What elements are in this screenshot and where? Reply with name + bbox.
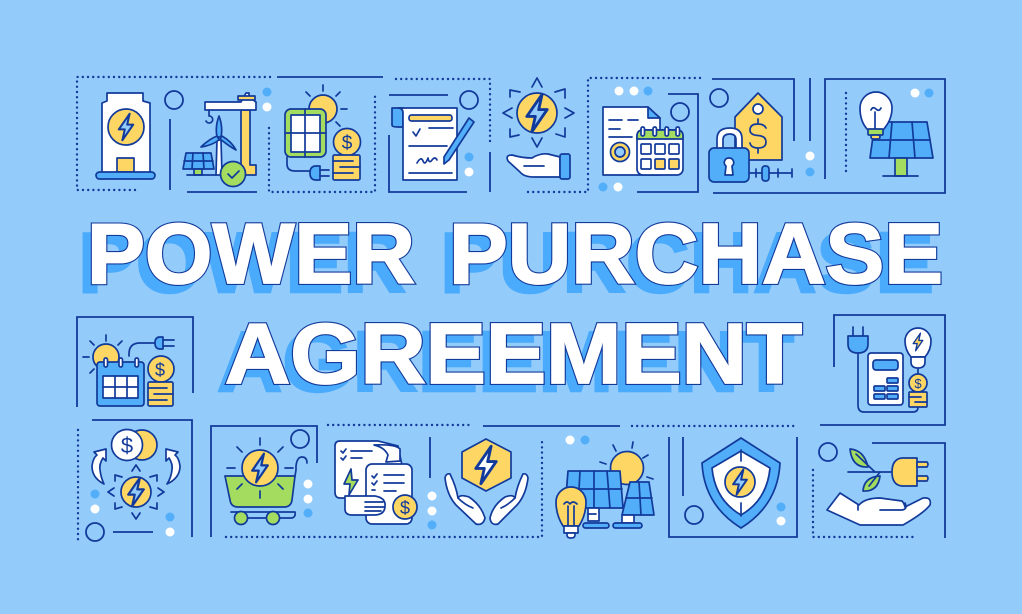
title outline: PURCHASE (449, 207, 943, 302)
icon: plug, calculator, bulb and coins: $ (914, 376, 922, 391)
icon: sun in open hand (503, 78, 574, 179)
icon: energy hexagon in hands (445, 439, 528, 524)
icon: power station building (96, 93, 155, 179)
title (78, 207, 943, 410)
icon: documents in hand with coin (335, 441, 417, 524)
title shadow: POWER (78, 216, 406, 311)
title text: PURCHASE (449, 207, 943, 302)
icon: document and calendar (603, 107, 683, 175)
icon: light bulb and solar panel (860, 92, 933, 176)
title outline (87, 207, 943, 402)
title shadow (78, 216, 934, 410)
icon: coins exchange with sun: $ (121, 433, 133, 458)
title text (87, 207, 943, 402)
icon: signed contract and pen (392, 108, 474, 180)
icon: solar panels, sun and bulb (556, 442, 654, 538)
icon: crane, wind turbine and solar panel (183, 93, 256, 186)
icon: plug, calculator, bulb and coins (848, 327, 931, 412)
icon: sun, calendar, coins and plug: $ (155, 360, 165, 380)
title text: AGREEMENT (225, 307, 802, 402)
icon: coins exchange with sun (92, 430, 180, 519)
title shadow: AGREEMENT (217, 315, 794, 410)
icon: documents in hand with coin: $ (400, 498, 410, 518)
icon: solar window with coins and plug (285, 85, 360, 180)
title shadow: PURCHASE (440, 216, 934, 311)
icon: hand with leaves and plug (827, 449, 930, 525)
icon: shopping cart with energy (225, 438, 307, 524)
icon: energy shield (702, 438, 780, 528)
title outline: AGREEMENT (225, 307, 802, 402)
icon: price tag and padlock (709, 93, 792, 182)
title outline: POWER (87, 207, 415, 302)
title text: POWER (87, 207, 415, 302)
icon: sun, calendar, coins and plug (83, 335, 174, 406)
icon: solar window with coins and plug: $ (342, 133, 353, 154)
